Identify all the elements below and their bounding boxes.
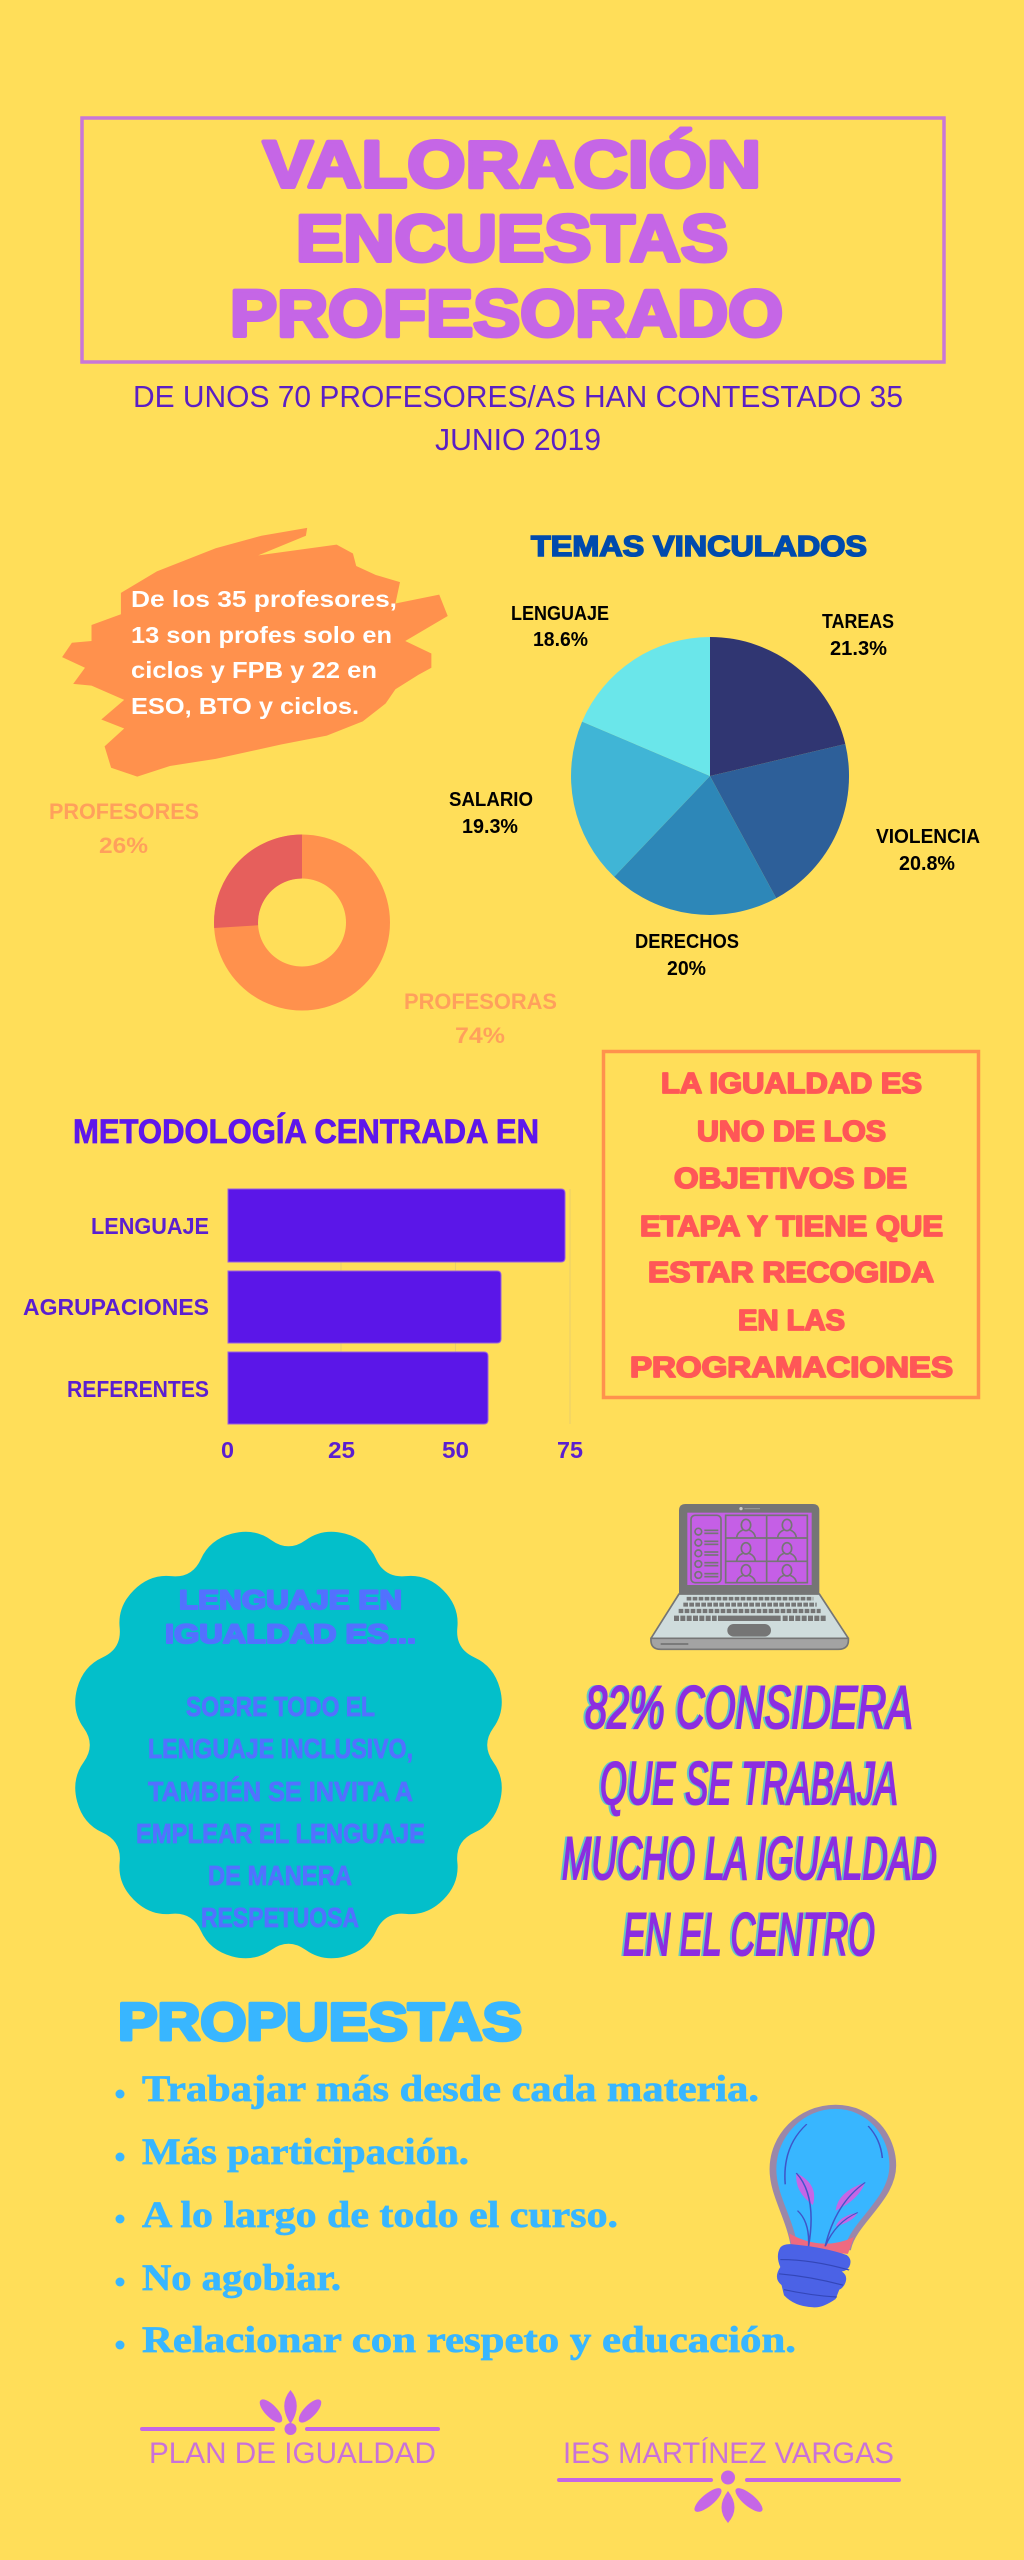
- title line: PROFESORADO: PROFESORADO: [230, 276, 783, 350]
- callout frame: [604, 1052, 978, 1398]
- badge body text: DE MANERA: [208, 1860, 352, 1891]
- callout text: UNO DE LOS: [697, 1116, 886, 1148]
- badge body text: [136, 1691, 425, 1933]
- badge body text: LENGUAJE INCLUSIVO,: [148, 1733, 413, 1764]
- pie label: lenguaje: 18.6%: [533, 629, 588, 651]
- icon: laptop with video call: [651, 1504, 848, 1649]
- label: profesoras 74%: PROFESORAS: [404, 989, 557, 1014]
- bar chart panel: metodología: [23, 1113, 583, 1463]
- brush text: ciclos y FPB y 22 en: [131, 657, 377, 683]
- category labels: REFERENTES: [67, 1376, 209, 1402]
- list item 4: No agobiar.: [142, 2258, 341, 2299]
- axis ticks: 0: [221, 1437, 234, 1463]
- pie label: derechos: DERECHOS: [635, 931, 739, 953]
- ornament: flower and lines: [140, 2390, 440, 2435]
- list item 5: Relacionar con respeto y educación.: [142, 2320, 796, 2361]
- label: profesores 26%: [49, 799, 199, 858]
- subtitle line 2: date: JUNIO 2019: [435, 422, 601, 457]
- brush stroke shape: [62, 528, 448, 777]
- category labels: [23, 1213, 209, 1402]
- pie label: derechos: [635, 931, 739, 980]
- brush text: [131, 586, 397, 719]
- brush text: De los 35 profesores,: [131, 586, 397, 612]
- list item 3: A lo largo de todo el curso.: [142, 2195, 618, 2236]
- title line: VALORACIÓN: VALORACIÓN: [263, 127, 761, 201]
- pie label: lenguaje: [511, 603, 609, 651]
- label: profesores 26%: PROFESORES: [49, 799, 199, 824]
- list item 2: Más participación.: [142, 2132, 469, 2173]
- badge heading: [165, 1585, 416, 1649]
- badge body text: SOBRE TODO EL: [186, 1691, 375, 1722]
- axis ticks: [221, 1437, 583, 1463]
- footer text left: PLAN DE IGUALDAD: [149, 2437, 436, 2470]
- stat text: 82% considera: [562, 1674, 937, 1968]
- category labels: LENGUAJE: [91, 1213, 209, 1239]
- brush text: 13 son profes solo en: [131, 622, 392, 648]
- scalloped badge shape: [75, 1532, 502, 1958]
- pie label: salario: SALARIO: [449, 789, 533, 811]
- pie heading: TEMAS VINCULADOS: [531, 531, 867, 563]
- axis ticks: 50: [442, 1437, 469, 1463]
- pie label: violencia: VIOLENCIA: [876, 826, 980, 848]
- donut ring: [214, 834, 390, 1010]
- label: profesoras 74%: [404, 989, 557, 1048]
- callout: igualdad box: [604, 1052, 978, 1398]
- propuestas heading: PROPUESTAS: [118, 1993, 522, 2052]
- donut chart: profesores / profesoras: [49, 799, 557, 1048]
- ornament: flower and lines: [557, 2470, 901, 2523]
- callout text: OBJETIVOS DE: [674, 1163, 907, 1195]
- bar chart heading: METODOLOGÍA CENTRADA EN: [73, 1113, 539, 1151]
- callout text: ETAPA Y TIENE QUE: [640, 1211, 943, 1243]
- footer: ies martínez vargas: [557, 2437, 901, 2523]
- footer text right: IES MARTÍNEZ VARGAS: [563, 2437, 894, 2470]
- list item 1: Trabajar más desde cada materia.: [142, 2069, 759, 2110]
- pie label: salario: [449, 789, 533, 838]
- subtitle line 1: DE UNOS 70 PROFESORES/AS HAN CONTESTADO 35: [133, 379, 903, 414]
- callout text: ESTAR RECOGIDA: [648, 1257, 934, 1289]
- brush text: ESO, BTO y ciclos.: [131, 693, 359, 719]
- badge: lenguaje en igualdad: [75, 1532, 502, 1958]
- subtitle: [133, 379, 903, 457]
- pie label: tareas: TAREAS: [822, 611, 894, 633]
- category labels: AGRUPACIONES: [23, 1294, 209, 1320]
- badge body text: EMPLEAR EL LENGUAJE: [136, 1818, 425, 1849]
- title panel: [82, 118, 944, 362]
- pie label: lenguaje: LENGUAJE: [511, 603, 609, 625]
- title line: ENCUESTAS: ENCUESTAS: [296, 201, 728, 275]
- pie label: tareas: [822, 611, 894, 660]
- icon: light bulb: [773, 2107, 893, 2307]
- axis ticks: 75: [557, 1437, 583, 1463]
- callout text: LA IGUALDAD ES: [661, 1068, 922, 1100]
- pie slices: [571, 637, 849, 915]
- pie label: violencia: [876, 826, 980, 875]
- callout: orange brush with teacher counts: [62, 528, 448, 777]
- bars: [228, 1189, 565, 1424]
- axis ticks: 25: [328, 1437, 355, 1463]
- pie label: violencia: 20.8%: [899, 853, 955, 875]
- badge body text: RESPETUOSA: [201, 1902, 359, 1933]
- pie label: tareas: 21.3%: [830, 638, 887, 660]
- pie label: derechos: 20%: [667, 958, 706, 980]
- label: profesores 26%: 26%: [99, 833, 148, 858]
- callout text: EN LAS: [738, 1305, 845, 1337]
- label: profesoras 74%: 74%: [455, 1023, 505, 1048]
- footer: plan de igualdad: [140, 2390, 440, 2470]
- callout text: PROGRAMACIONES: [630, 1352, 953, 1384]
- panel: propuestas: [116, 1993, 796, 2361]
- pie label: salario: 19.3%: [462, 816, 518, 838]
- callout text: [630, 1068, 953, 1384]
- badge body text: TAMBIÉN SE INVITA A: [148, 1776, 413, 1807]
- badge heading: LENGUAJE EN: [179, 1585, 402, 1615]
- badge heading: IGUALDAD ES...: [165, 1619, 416, 1649]
- title frame: [82, 118, 944, 362]
- pie chart panel: temas vinculados: [449, 531, 980, 980]
